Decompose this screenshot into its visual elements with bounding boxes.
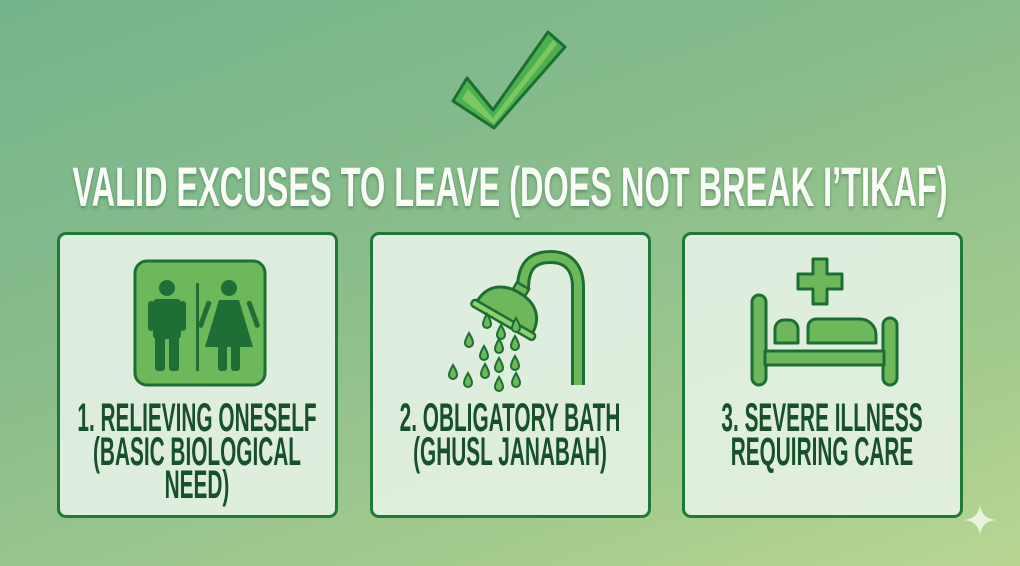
- label: [721, 396, 923, 474]
- icon: hospital bed: [750, 258, 898, 386]
- icon: check mark: [452, 30, 566, 130]
- label: 2. OBLIGATORY BATH: [400, 396, 620, 440]
- label: 1. RELIEVING ONESELF: [77, 396, 317, 440]
- panel: obligatory bath: [370, 232, 651, 518]
- label: 3. SEVERE ILLNESS: [721, 396, 923, 440]
- panel: severe illness: [682, 232, 963, 518]
- label: [400, 396, 620, 474]
- panel: relieving oneself: [57, 232, 338, 518]
- label: (BASIC BIOLOGICAL: [93, 430, 301, 474]
- label: (GHUSL JANABAH): [413, 430, 607, 474]
- icon: shower: [448, 250, 585, 392]
- label: [77, 396, 317, 507]
- label: REQUIRING CARE: [731, 430, 913, 474]
- icon: sparkle: [964, 504, 996, 536]
- label: NEED): [165, 463, 229, 507]
- title: VALID EXCUSES TO LEAVE (DOES NOT BREAK I’TIKAF): [72, 155, 948, 218]
- icon: restroom: [134, 260, 266, 386]
